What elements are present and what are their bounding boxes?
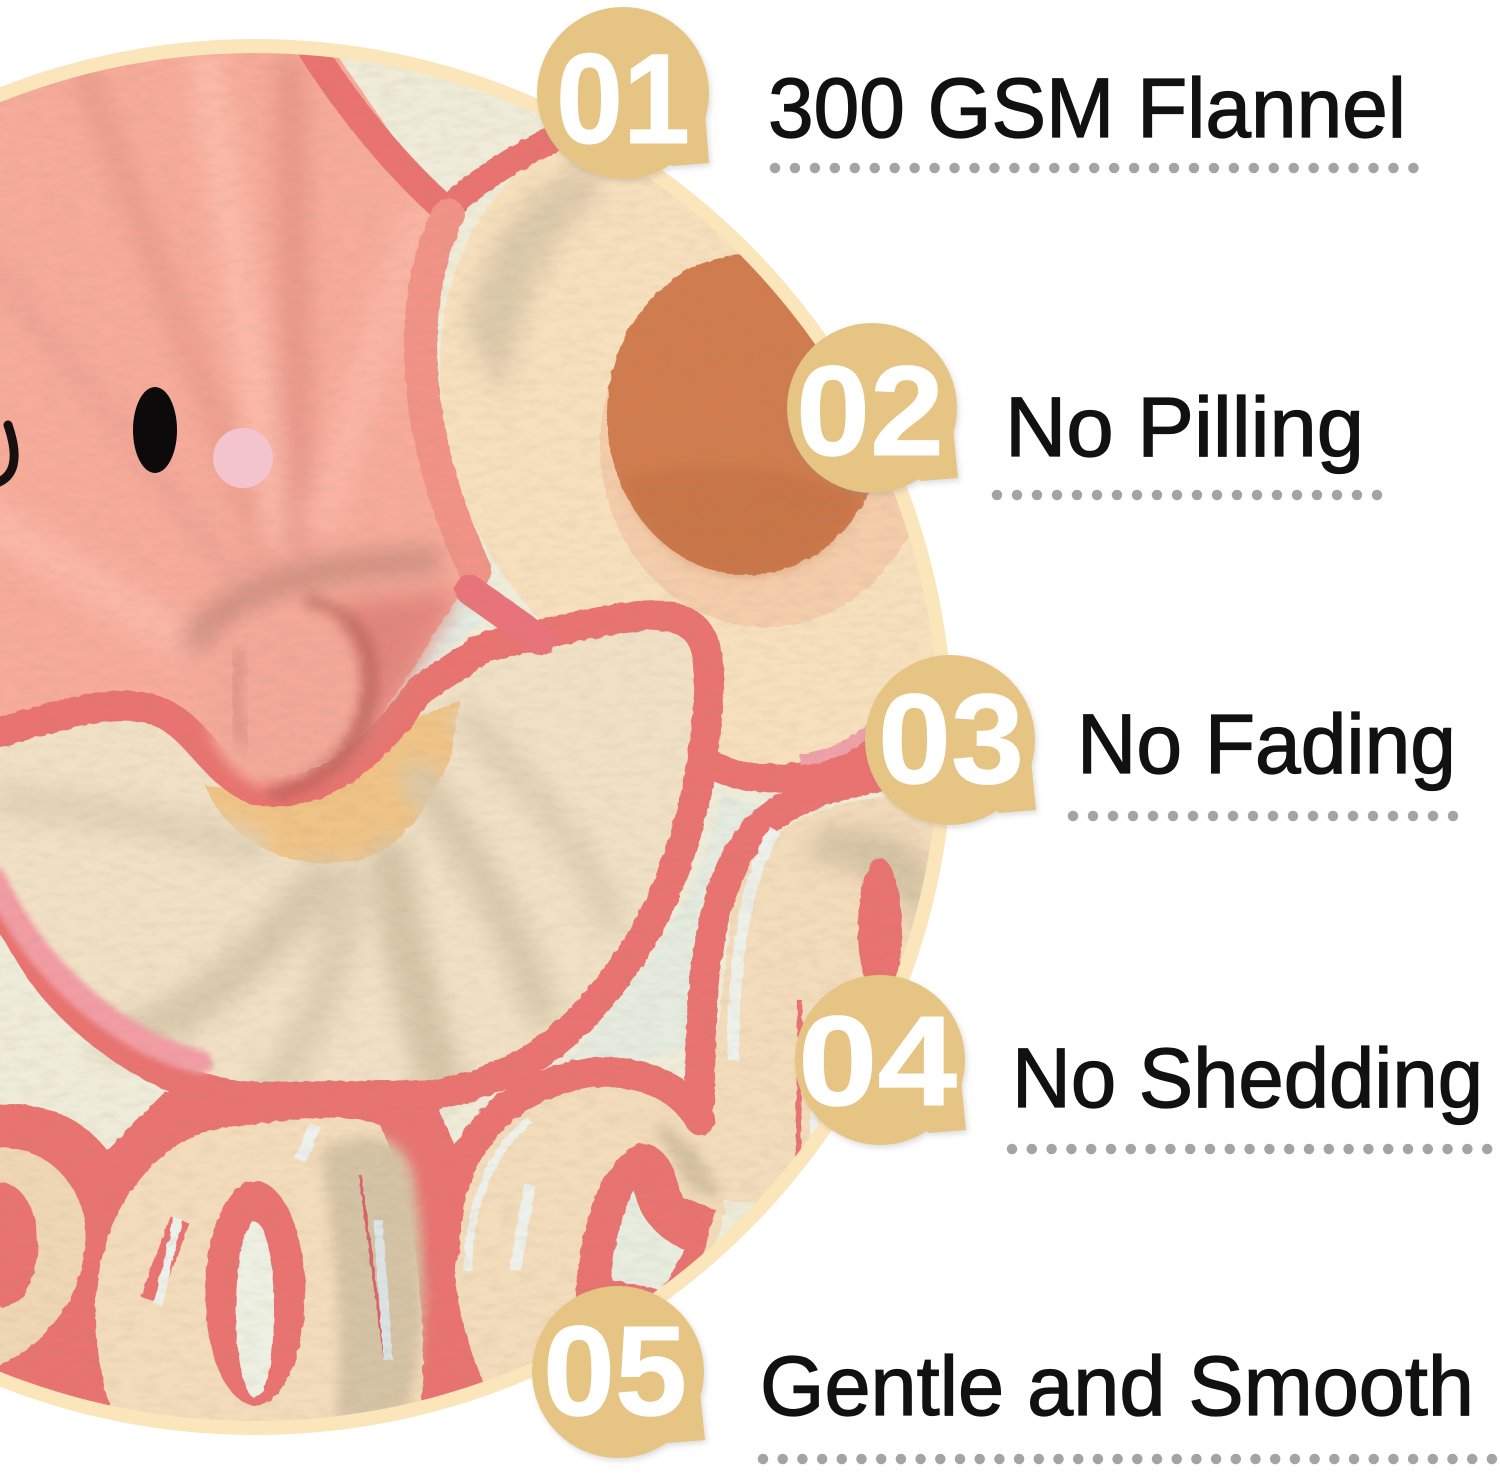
lilac shadow on right arc [799,725,866,766]
peach circle panel [440,150,934,765]
pale pink shadow on lower-left arc [0,880,200,1062]
face: eye [133,387,177,473]
pink outline: top bands [312,50,900,778]
curl: deep pink shade right of the roll [320,590,462,790]
feature 3 label: No Fading [1077,697,1456,791]
badge 01: 01 [556,28,690,171]
blanket cream ring [0,39,953,1435]
badge 01 [537,7,709,179]
pink letter backing [0,1092,483,1406]
orange circle under the folds [205,700,460,863]
curl: inner shadow [235,650,245,745]
right letter [700,770,960,1210]
cream background [0,58,886,1242]
plush texture overlay [0,30,960,1445]
orange sun [607,255,887,575]
face: cheek [213,428,273,488]
orange halo [599,384,908,628]
curl: outer shade [270,600,371,795]
feature 4 label: No Shedding [1012,1031,1483,1125]
salmon character head [0,30,470,795]
badge 05: 05 [543,1300,687,1443]
feature 2 label: No Pilling [1005,380,1364,474]
radial folds in the head [0,60,420,640]
badge 03: 03 [878,668,1024,811]
blanket artwork [0,53,934,1421]
pale sliver beside curl [416,598,482,673]
shaded tan patch in peach panel [465,160,600,400]
feature 1 label: 300 GSM Flannel [768,61,1406,155]
bottom letters [0,1072,725,1450]
panel: round blanket photo [0,30,1000,1450]
letter c outline and fill [455,1077,725,1400]
curl: dark shadow under fold [190,560,440,650]
pale blue gap right of lower face [568,795,760,1062]
lower radial folds [10,720,610,1090]
peach lower face fill [0,616,709,1090]
pink outline of lower face [0,616,709,1097]
badge 02: 02 [796,340,944,483]
letter two [96,1118,423,1430]
feature 5 label: Gentle and Smooth [760,1339,1474,1433]
curl: rolled fabric centre [205,617,361,786]
face: smile fragment [0,425,14,484]
letter one [0,1148,86,1370]
badge 05 [532,1286,705,1458]
badge 04: 04 [798,990,957,1133]
letter c inner curl [575,1143,716,1300]
